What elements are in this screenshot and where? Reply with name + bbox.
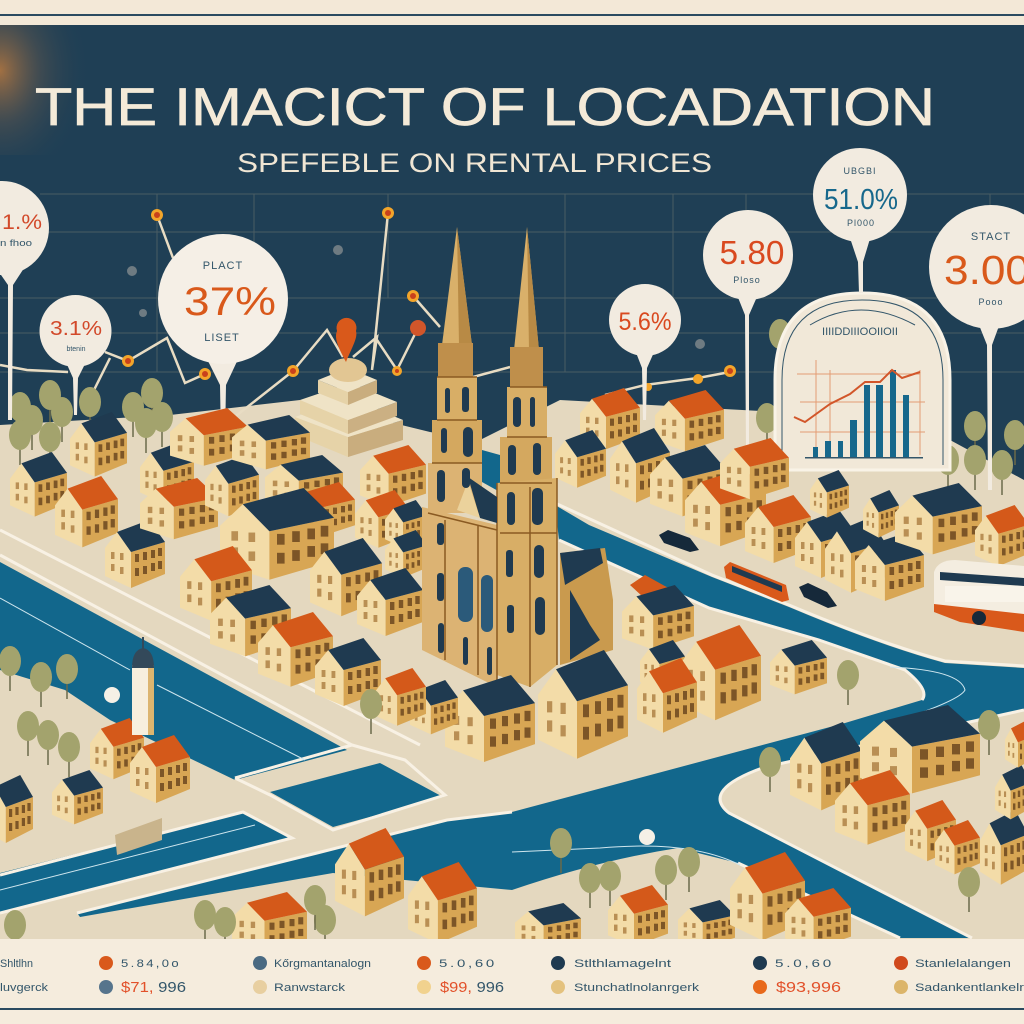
legend row two: Sadankentlankelr xyxy=(915,982,1024,994)
land base xyxy=(0,400,1024,940)
pin: 1.% far left: 1.% xyxy=(2,211,42,234)
legend row two: Stunchatlnolanrgerk xyxy=(574,982,700,994)
legend row one: 5.84,0o xyxy=(121,958,181,970)
cars xyxy=(659,530,699,552)
pin: 5.6% xyxy=(609,284,681,420)
legend panel xyxy=(0,939,1024,1024)
annex xyxy=(560,548,613,665)
nave front xyxy=(422,507,497,687)
pin: 1.% far left xyxy=(0,181,49,420)
pin: 37%: PLACT xyxy=(203,260,243,272)
pin: 3.00: Pooo xyxy=(978,297,1004,307)
legend row one: Stanlelalangen xyxy=(915,958,1011,970)
pin: 5.80 xyxy=(703,210,793,450)
title: THE IMACICT OF LOCADATION xyxy=(35,78,935,137)
top rule xyxy=(0,14,1024,16)
river: lower canal xyxy=(0,812,290,913)
river: small upper inlet xyxy=(482,450,500,492)
pin: 5.80: 5.80 xyxy=(720,234,784,271)
pin: 1.% far left: n fhoo xyxy=(0,238,32,248)
orange bus xyxy=(724,562,789,602)
pin: 3.1%: 3.1% xyxy=(50,318,102,340)
legend row two: luvgerck xyxy=(0,982,49,994)
river: small basin xyxy=(270,763,443,827)
bell tower xyxy=(132,637,154,735)
chart marker dots xyxy=(122,207,736,391)
vehicles xyxy=(659,530,1024,632)
spires xyxy=(442,227,472,345)
gable roof xyxy=(468,477,497,523)
moored boat xyxy=(115,818,162,855)
pin: 3.00: 3.00 xyxy=(944,247,1024,293)
left tower xyxy=(438,343,473,377)
legend row two: Ranwstarck xyxy=(274,982,346,994)
trees: lower left xyxy=(0,646,336,955)
trees: upper right xyxy=(756,319,1024,495)
legend row two xyxy=(0,979,1024,996)
pin: 3.00: STACT xyxy=(971,231,1011,243)
pin: 3.1%: btenin xyxy=(66,346,86,353)
pin: 37% xyxy=(158,234,288,440)
buildings: bottom row xyxy=(232,828,851,953)
buttress lines xyxy=(428,377,557,687)
legend row one: Stlthlamagelnt xyxy=(574,958,671,970)
pin: 51.0%: UBGBI xyxy=(843,166,877,176)
legend row two: $99, 996 xyxy=(440,979,504,996)
pin: 3.00 xyxy=(929,205,1024,490)
pin: 5.6%: 5.6% xyxy=(618,308,672,336)
legend row two: $71, 996 xyxy=(121,979,186,996)
trees: lower centre and right xyxy=(360,660,1000,912)
pin: 51.0% xyxy=(813,148,907,293)
right tower xyxy=(510,347,543,387)
buildings: lower right xyxy=(790,705,1024,885)
river: left channel xyxy=(0,562,347,780)
legend row one: Shltlhn xyxy=(0,958,33,970)
navy header panel xyxy=(0,25,1024,585)
legend row two: $93,996 xyxy=(776,979,841,996)
river current lines xyxy=(0,598,965,890)
map pin on stepped monument xyxy=(295,318,403,457)
pin: 37%: 37% xyxy=(184,280,276,324)
legend row one: 5.0,60 xyxy=(439,958,497,970)
pin: 37%: LISET xyxy=(204,332,240,344)
big bus xyxy=(934,560,1024,630)
pin: 51.0%: Pl000 xyxy=(847,218,875,228)
roads and river banks xyxy=(0,503,1024,938)
subtitle: SPEFEBLE ON RENTAL PRICES xyxy=(237,148,712,178)
trend lines and markers xyxy=(0,213,730,423)
buildings: central island xyxy=(375,575,827,762)
buildings: upper left district xyxy=(10,408,427,706)
cathedral xyxy=(422,227,613,687)
pin: 51.0%: 51.0% xyxy=(824,184,898,216)
background grid xyxy=(0,194,1024,372)
legend row one xyxy=(0,956,1011,970)
chart card xyxy=(775,293,950,470)
arched windows xyxy=(437,387,545,675)
legend row one: 5.0,60 xyxy=(775,958,834,970)
river: main channel xyxy=(77,505,1024,938)
pin: 5.80: Ploso xyxy=(733,275,761,285)
rose windows xyxy=(458,567,473,622)
legend row one: Kőrgmantanalogn xyxy=(274,958,371,970)
white ball on left river xyxy=(104,687,120,703)
trees: upper left xyxy=(9,378,173,467)
pin: 3.1% xyxy=(40,295,112,415)
buildings: upper right district xyxy=(555,388,1024,601)
chart card: IIIIDDIIIOOIIOII xyxy=(822,326,898,338)
buildings: lower left xyxy=(0,718,190,843)
